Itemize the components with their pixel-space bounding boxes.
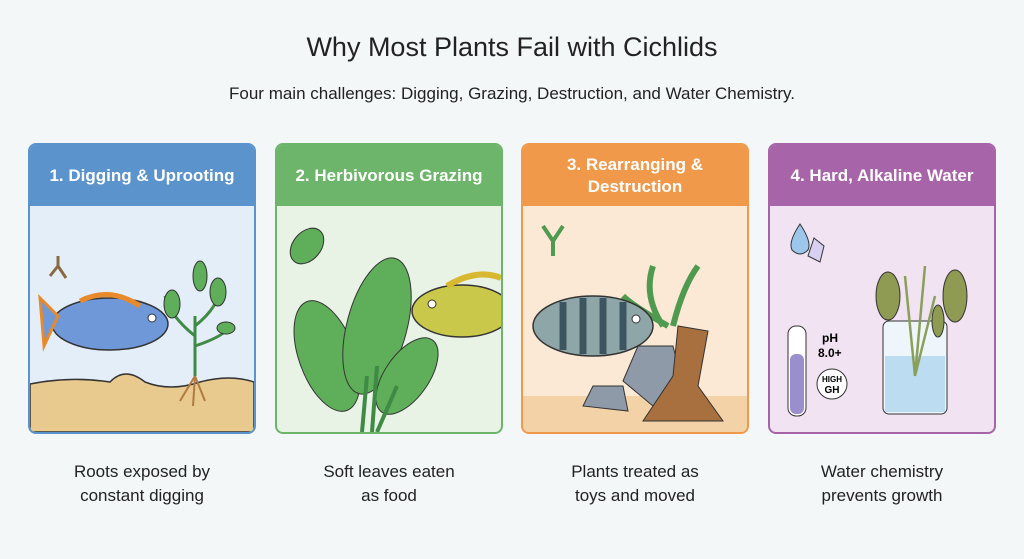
heading: digging	[30, 145, 254, 206]
panel: digging	[28, 143, 256, 434]
illustration: test tube, glass, wilting plant: GH	[824, 385, 840, 396]
caption: destruction	[571, 462, 699, 505]
illustration: fish, plant, sand	[30, 256, 254, 432]
title: Why Most Plants Fail with Cichlids	[306, 32, 718, 62]
illustration: fish, rocks, driftwood	[523, 224, 747, 432]
caption: grazing	[323, 462, 455, 505]
panel: destruction	[521, 143, 749, 434]
heading: destruction: 3. Rearranging &	[567, 154, 703, 174]
panel: grazing	[275, 143, 503, 434]
heading: destruction	[523, 145, 747, 206]
subtitle: Four main challenges: Digging, Grazing, Destruction, and Water Chemistry.	[229, 84, 795, 103]
illustration: leaves and fish	[290, 228, 501, 432]
caption: grazing: as food	[361, 486, 417, 505]
caption: grazing: Soft leaves eaten	[323, 462, 455, 481]
illustration: test tube, glass, wilting plant: pH	[822, 331, 838, 345]
caption: digging: Roots exposed by	[74, 462, 210, 481]
illustration: test tube, glass, wilting plant: 8.0+	[818, 346, 842, 360]
caption: destruction: toys and moved	[575, 486, 695, 505]
heading: digging: 1. Digging & Uprooting	[49, 166, 235, 184]
caption: digging	[74, 462, 210, 505]
panel: water	[768, 143, 996, 434]
caption: digging: constant digging	[80, 486, 204, 505]
caption: water: Water chemistry	[821, 462, 943, 481]
heading: water	[770, 145, 994, 206]
caption: destruction: Plants treated as	[571, 462, 699, 481]
heading: grazing: 2. Herbivorous Grazing	[295, 166, 483, 184]
caption: water: prevents growth	[822, 486, 942, 505]
heading: grazing	[277, 145, 501, 206]
illustration: test tube, glass, wilting plant: HIGH	[822, 375, 842, 384]
caption: water	[821, 462, 944, 505]
heading: water: 4. Hard, Alkaline Water	[791, 166, 973, 184]
heading: destruction: Destruction	[588, 176, 682, 196]
illustration: test tube, glass, wilting plant	[788, 223, 968, 416]
